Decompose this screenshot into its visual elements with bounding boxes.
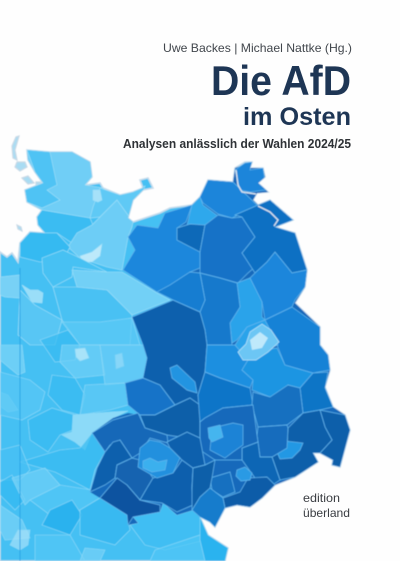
North Sea islands [12, 136, 43, 231]
publisher [303, 491, 350, 520]
coast line of Rügen and Usedom [236, 170, 278, 226]
land outline [0, 150, 350, 561]
tagline: Analysen anlässlich der Wahlen 2024/25 [123, 137, 351, 151]
authors: Uwe Backes | Michael Nattke (Hg.) [163, 41, 352, 55]
map of Germany by districts [0, 136, 350, 561]
publisher: edition [303, 491, 340, 505]
Berlin [238, 324, 279, 360]
spine crease [19, 268, 21, 561]
southern districts [0, 318, 228, 561]
publisher: überland [303, 506, 350, 520]
title: Die AfD [211, 57, 351, 104]
eastern districts [90, 162, 350, 527]
subtitle: im Osten [243, 103, 351, 131]
northern districts [0, 148, 170, 345]
